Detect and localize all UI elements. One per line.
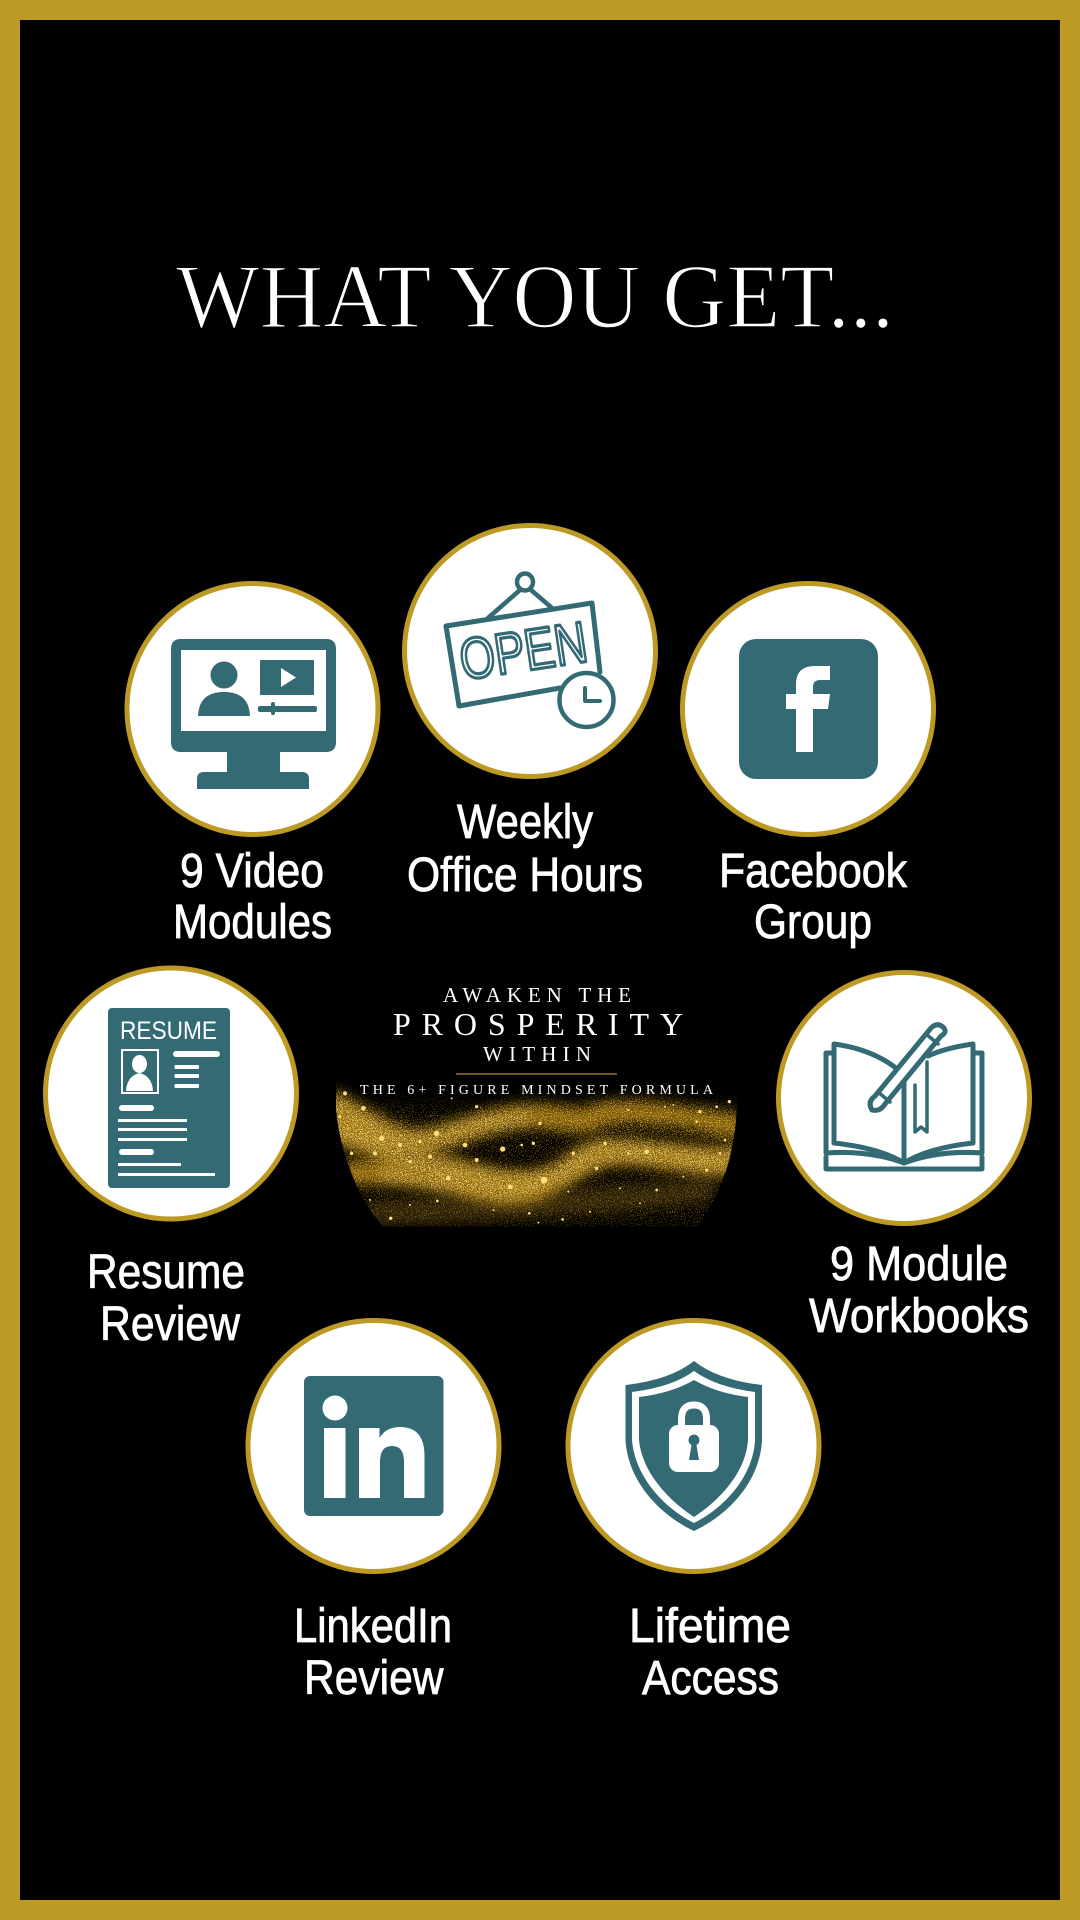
icon: open sign with clock: OPEN bbox=[455, 610, 592, 693]
logo text: awaken the: AWAKEN THE bbox=[443, 983, 631, 1007]
item: 9 module workbooks bbox=[778, 972, 1030, 1343]
item: weekly office hours bbox=[404, 526, 656, 902]
logo divider bbox=[456, 1073, 617, 1075]
circle badge bbox=[778, 972, 1030, 1224]
label: Facebook bbox=[719, 845, 908, 898]
icon: shield with padlock bbox=[626, 1361, 762, 1531]
gold sparkle bowl bbox=[333, 1091, 740, 1227]
circle badge bbox=[682, 584, 934, 834]
label: Modules bbox=[173, 896, 332, 949]
icon: resume document bbox=[108, 1008, 230, 1188]
label: Lifetime bbox=[629, 1600, 791, 1653]
label: Weekly bbox=[457, 796, 593, 849]
item: facebook group bbox=[682, 584, 934, 949]
label bbox=[294, 1600, 452, 1705]
label: Review bbox=[304, 1652, 444, 1705]
label bbox=[629, 1600, 791, 1705]
label: Review bbox=[100, 1298, 240, 1351]
label: Resume bbox=[87, 1246, 245, 1299]
item: linkedin review bbox=[248, 1320, 499, 1705]
item: lifetime access bbox=[568, 1320, 819, 1705]
label bbox=[719, 845, 908, 949]
item: 9 video modules bbox=[127, 584, 378, 949]
logo text: prosperity: PROSPERITY bbox=[393, 1006, 683, 1042]
circle badge bbox=[568, 1320, 819, 1572]
circle badge bbox=[404, 526, 656, 776]
label bbox=[87, 1246, 245, 1351]
circle badge bbox=[248, 1320, 499, 1572]
title: WHAT YOU GET... bbox=[176, 246, 894, 347]
icon: resume document: RESUME bbox=[120, 1017, 217, 1045]
icon: linkedin bbox=[304, 1376, 444, 1516]
icon: open book with pencil bbox=[826, 1025, 982, 1169]
circle badge bbox=[127, 584, 378, 834]
label bbox=[407, 796, 643, 902]
label: Access bbox=[642, 1652, 779, 1705]
label: 9 Module bbox=[830, 1238, 1008, 1291]
centre logo: awaken the prosperity within bbox=[333, 983, 740, 1227]
logo tagline: THE 6+ FIGURE MINDSET FORMULA bbox=[360, 1083, 714, 1098]
label: Office Hours bbox=[407, 849, 643, 902]
label bbox=[809, 1238, 1029, 1343]
label: 9 Video bbox=[180, 845, 324, 898]
icon: facebook bbox=[739, 639, 878, 779]
item: resume review bbox=[46, 968, 296, 1351]
label: LinkedIn bbox=[294, 1600, 452, 1653]
logo text: within: WITHIN bbox=[483, 1042, 591, 1066]
icon: open sign with clock bbox=[446, 574, 614, 727]
label: Group bbox=[754, 896, 872, 949]
icon: monitor with video bbox=[171, 639, 336, 789]
label: Workbooks bbox=[809, 1290, 1029, 1343]
label bbox=[173, 845, 332, 949]
circle badge bbox=[46, 968, 296, 1219]
